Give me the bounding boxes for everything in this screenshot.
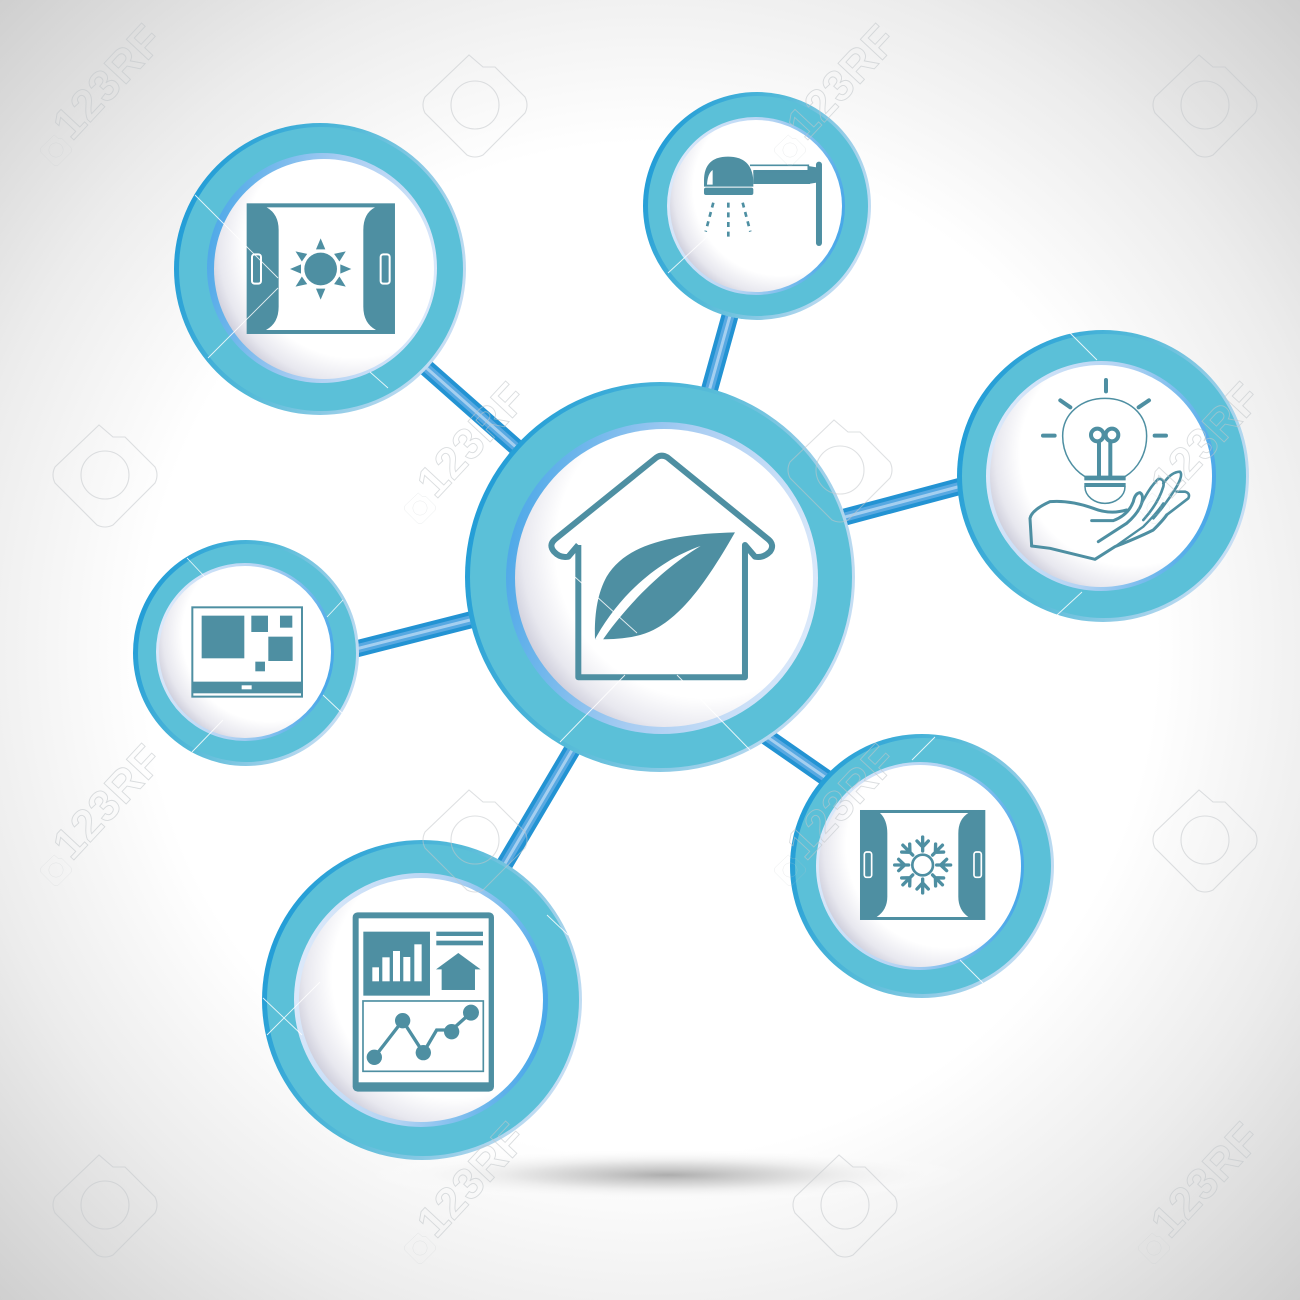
node: sun window [174, 123, 466, 415]
node: snow window [790, 734, 1054, 998]
node: floor plan screen [133, 540, 359, 766]
watermark pattern: 123RF [1141, 373, 1271, 507]
icon: window with sun [247, 203, 395, 334]
icon: screen with tiles [192, 607, 302, 697]
icon: window with snowflake [860, 810, 985, 920]
watermark pattern: 123RF [777, 15, 907, 149]
watermark pattern: 123RF [407, 373, 537, 507]
icon: tablet dashboard [353, 912, 494, 1092]
watermark pattern: 123RF [407, 1113, 537, 1247]
watermark pattern: 123RF [1141, 1113, 1271, 1247]
connector tubes [352, 305, 965, 872]
icon: shower head [704, 157, 822, 246]
node: shower [643, 92, 871, 320]
node: energy dashboard tablet [262, 840, 582, 1160]
watermark pattern: 123RF [777, 735, 907, 869]
scratch highlights on rings [187, 195, 1097, 1035]
node: light bulb in hand [957, 330, 1249, 622]
node: central green house [465, 382, 855, 772]
watermark pattern: 123RF [43, 15, 173, 149]
floor shadow [368, 1149, 968, 1201]
icon: house with leaf [551, 456, 772, 677]
watermark pattern: 123RF [43, 735, 173, 869]
icon: bulb and hand [1030, 380, 1189, 559]
